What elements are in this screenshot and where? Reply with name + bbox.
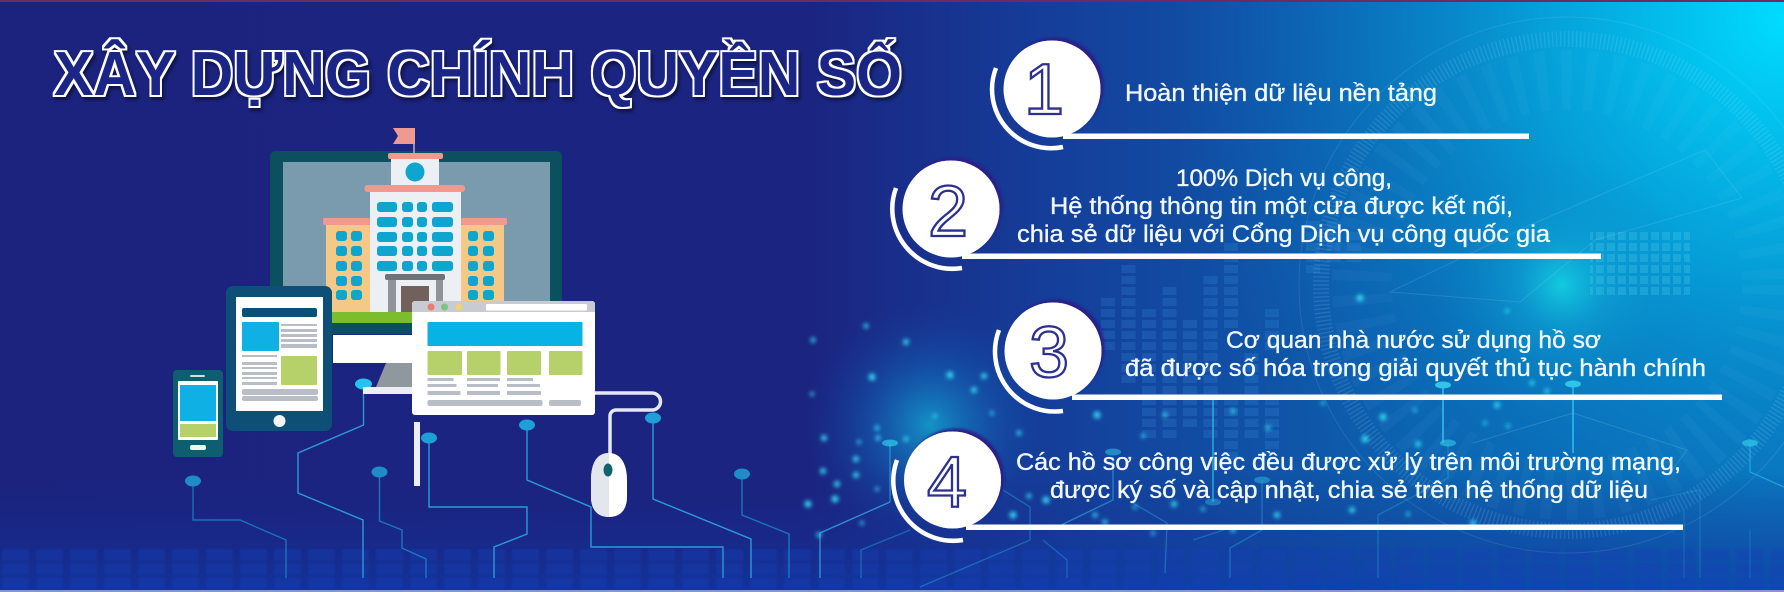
item 1 arc <box>992 68 1063 148</box>
item 2 text <box>1017 165 1551 248</box>
item 2 arc <box>892 188 962 269</box>
item 4 connector line <box>966 524 1683 530</box>
item 4 text: được ký số và cập nhật, chia sẻ trên hệ thống dữ liệu <box>1050 477 1648 504</box>
circuit nodes: right <box>882 380 1758 506</box>
item 1 text: Hoàn thiện dữ liệu nền tảng <box>1125 80 1437 107</box>
illustration: devices <box>173 128 660 517</box>
item 3 number: 3 <box>1029 313 1069 393</box>
item 4 <box>893 432 1683 541</box>
item 3 <box>995 302 1722 412</box>
phone <box>173 370 223 457</box>
item 2 number: 2 <box>928 172 968 252</box>
item 3 text: đã được số hóa trong giải quyết thủ tục hành chính <box>1125 355 1706 382</box>
item 3 arc <box>995 330 1063 412</box>
glowing particles <box>804 294 1550 538</box>
item 4 number: 4 <box>927 443 967 523</box>
monitor <box>270 151 562 394</box>
item 4 arc <box>893 460 963 541</box>
item 2 badge <box>902 160 1000 258</box>
item 1 number: 1 <box>1024 50 1064 130</box>
item 1 connector line <box>1063 134 1529 139</box>
item 1 <box>992 40 1529 148</box>
item 3 text <box>1125 327 1706 382</box>
circuit lines: left <box>193 384 910 578</box>
item 4 text <box>1016 449 1681 504</box>
background tech ring <box>1299 17 1784 553</box>
browser window <box>412 301 595 415</box>
item 4 badge <box>904 432 1001 528</box>
circuit nodes: left <box>185 378 750 486</box>
item 4 text: Các hồ sơ công việc đều được xử lý trên môi trường mạng, <box>1016 449 1681 476</box>
item 3 connector line <box>1072 394 1722 400</box>
background tile pattern <box>0 220 1784 590</box>
title: XÂY DỰNG CHÍNH QUYỀN SỐ <box>54 40 902 109</box>
circuit lines: right <box>890 384 1784 587</box>
item 3 text: Cơ quan nhà nước sử dụng hồ sơ <box>1226 327 1601 354</box>
item 1 badge <box>1004 40 1100 138</box>
item 2 connector line <box>962 254 1601 259</box>
item 2 <box>892 160 1601 269</box>
item 2 text: Hệ thống thông tin một cửa được kết nối, <box>1050 193 1513 220</box>
item 2 text: chia sẻ dữ liệu với Cổng Dịch vụ công quốc gia <box>1017 221 1551 248</box>
building <box>323 128 507 323</box>
vertical stand bar <box>414 422 420 486</box>
item 2 text: 100% Dịch vụ công, <box>1176 165 1392 192</box>
tablet <box>226 286 332 431</box>
mouse and cable <box>591 393 660 517</box>
item 3 badge <box>1004 302 1102 400</box>
